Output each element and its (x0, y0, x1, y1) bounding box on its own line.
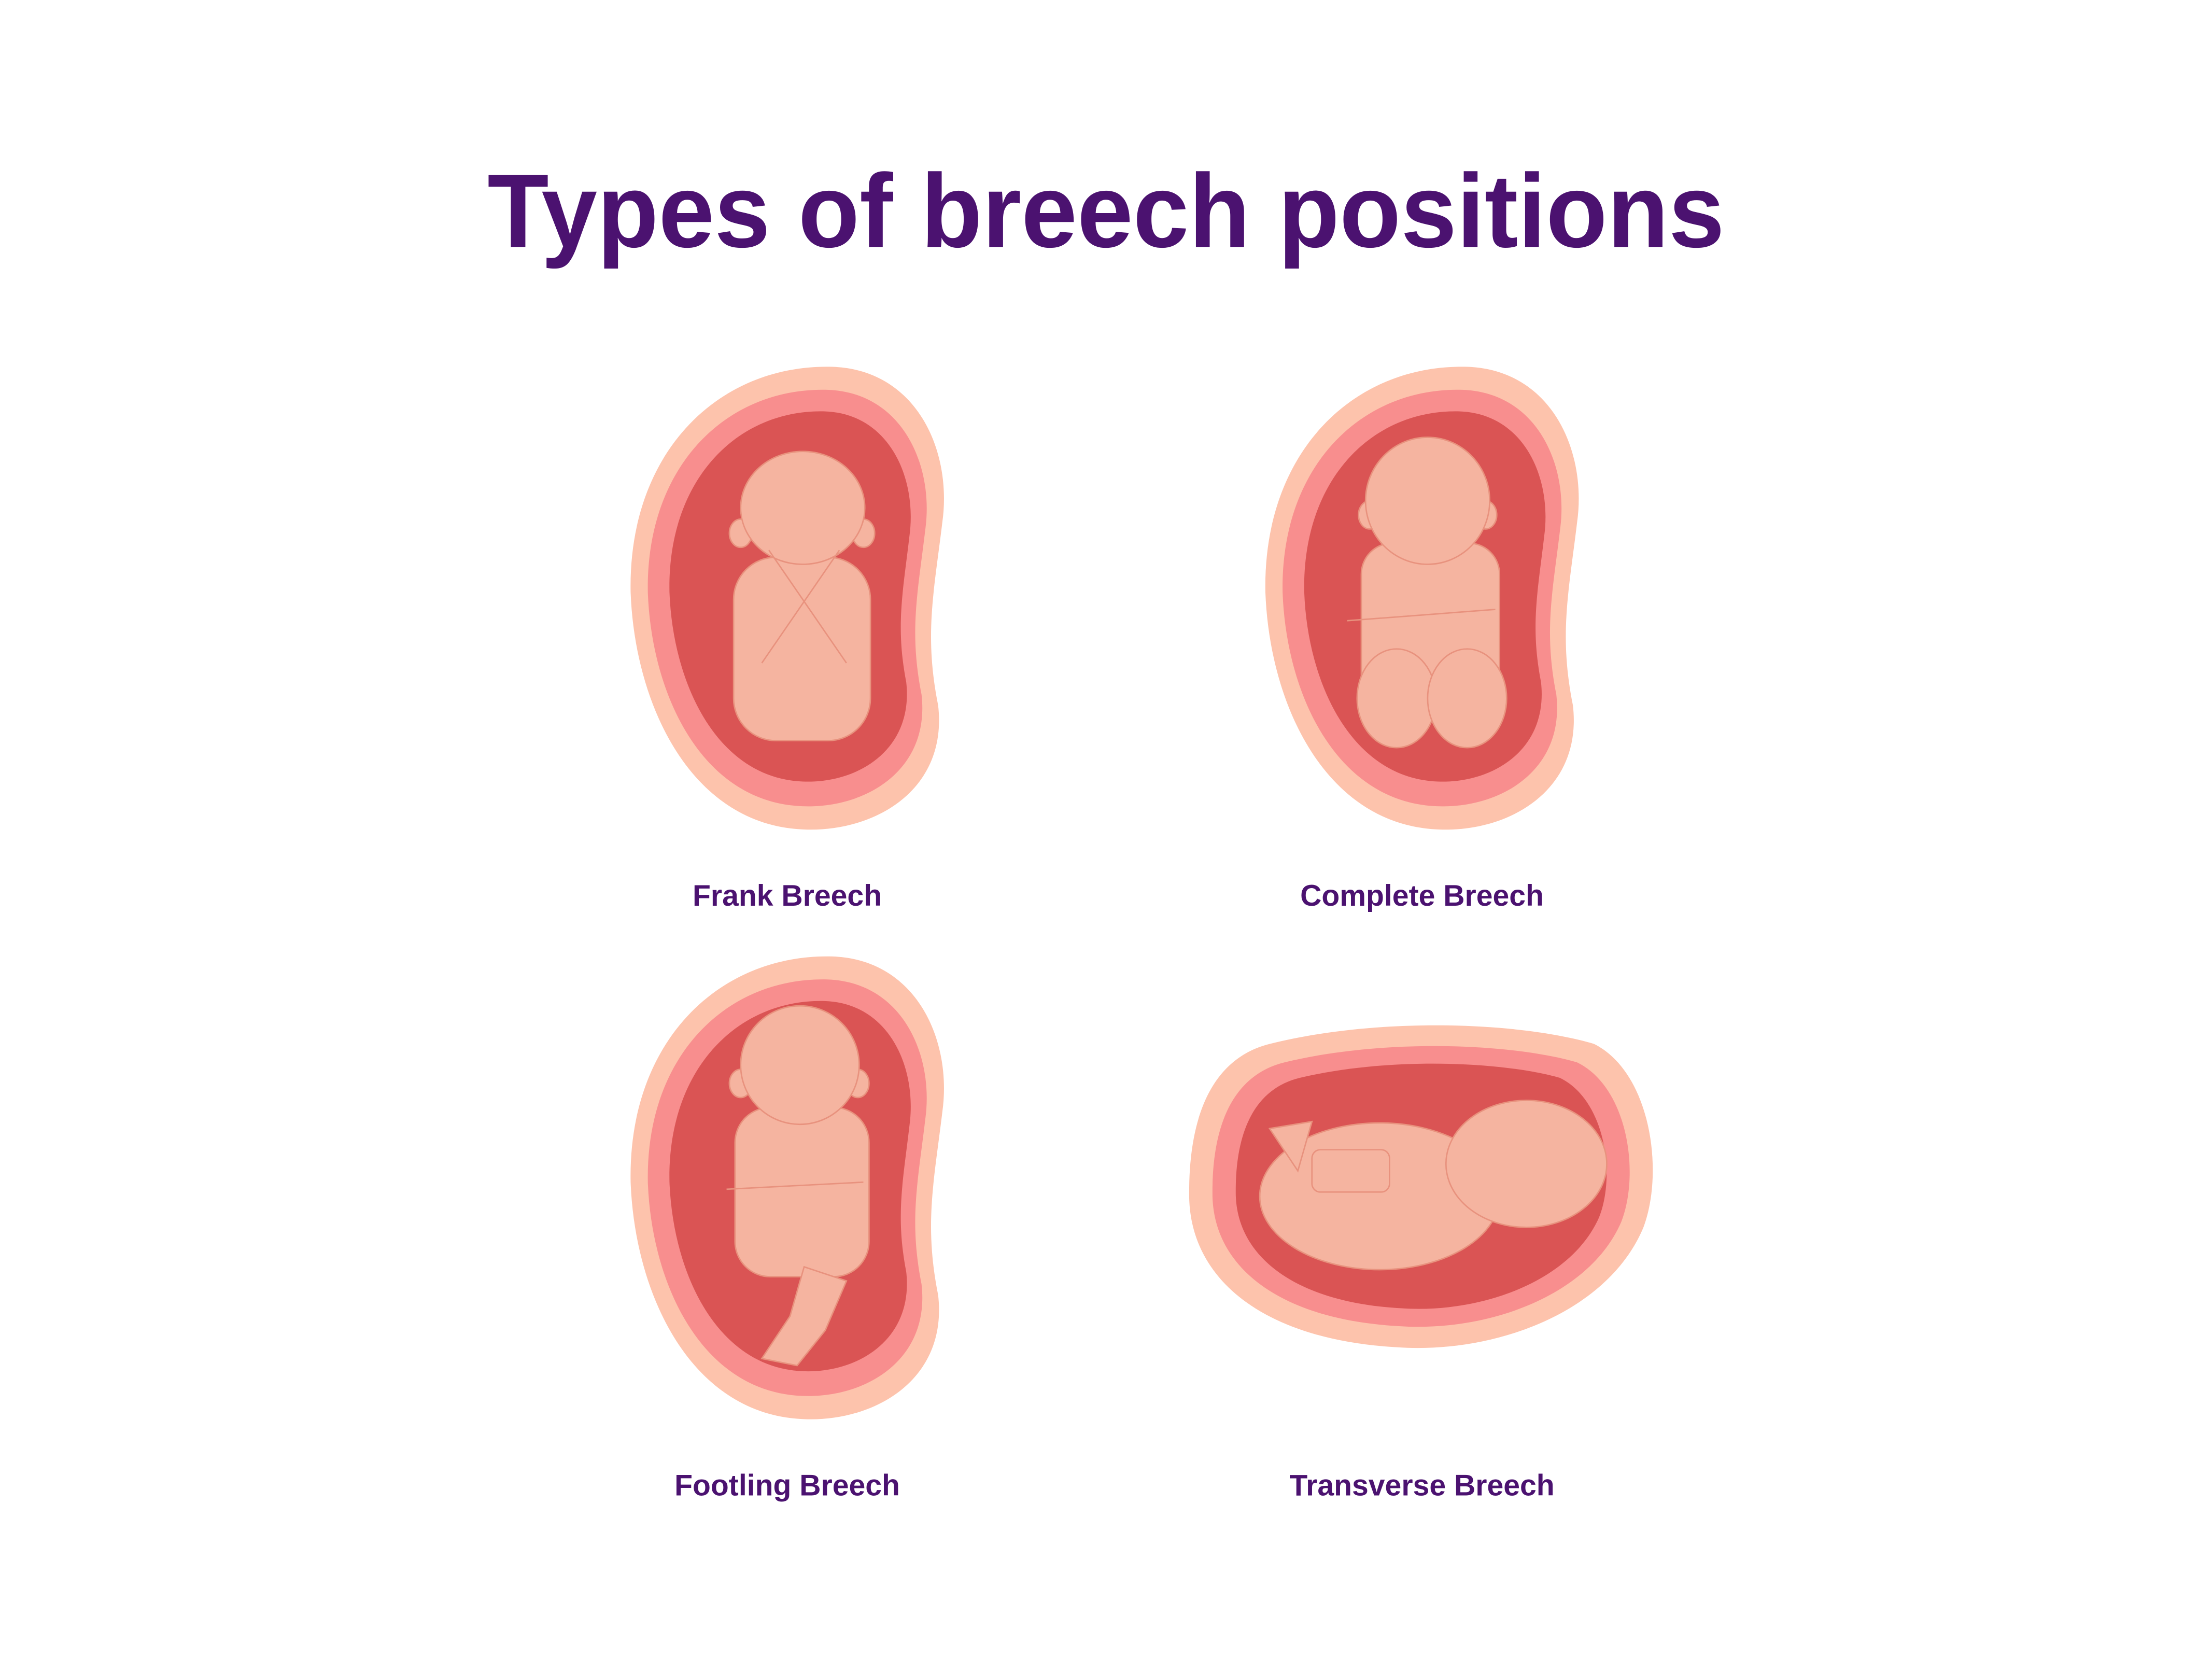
womb: footling (630, 957, 944, 1419)
womb: transverse (1189, 1025, 1653, 1348)
baby: transverse (1260, 1100, 1607, 1270)
baby: complete (1347, 438, 1506, 748)
panel: complete breech (1265, 367, 1579, 912)
title: Types of breech positions (487, 152, 1725, 269)
label: frank breech: Frank Breech (693, 879, 882, 912)
panel: frank breech (630, 367, 944, 912)
label: complete breech: Complete Breech (1300, 879, 1544, 912)
baby: frank (729, 452, 875, 741)
panel: transverse breech (1189, 1025, 1653, 1502)
womb: frank (630, 367, 944, 830)
womb: complete (1265, 367, 1579, 830)
panel: footling breech (630, 957, 944, 1502)
label: footling breech: Footling Breech (674, 1469, 900, 1502)
baby: footling (727, 1006, 869, 1366)
label: transverse breech: Transverse Breech (1289, 1469, 1555, 1502)
